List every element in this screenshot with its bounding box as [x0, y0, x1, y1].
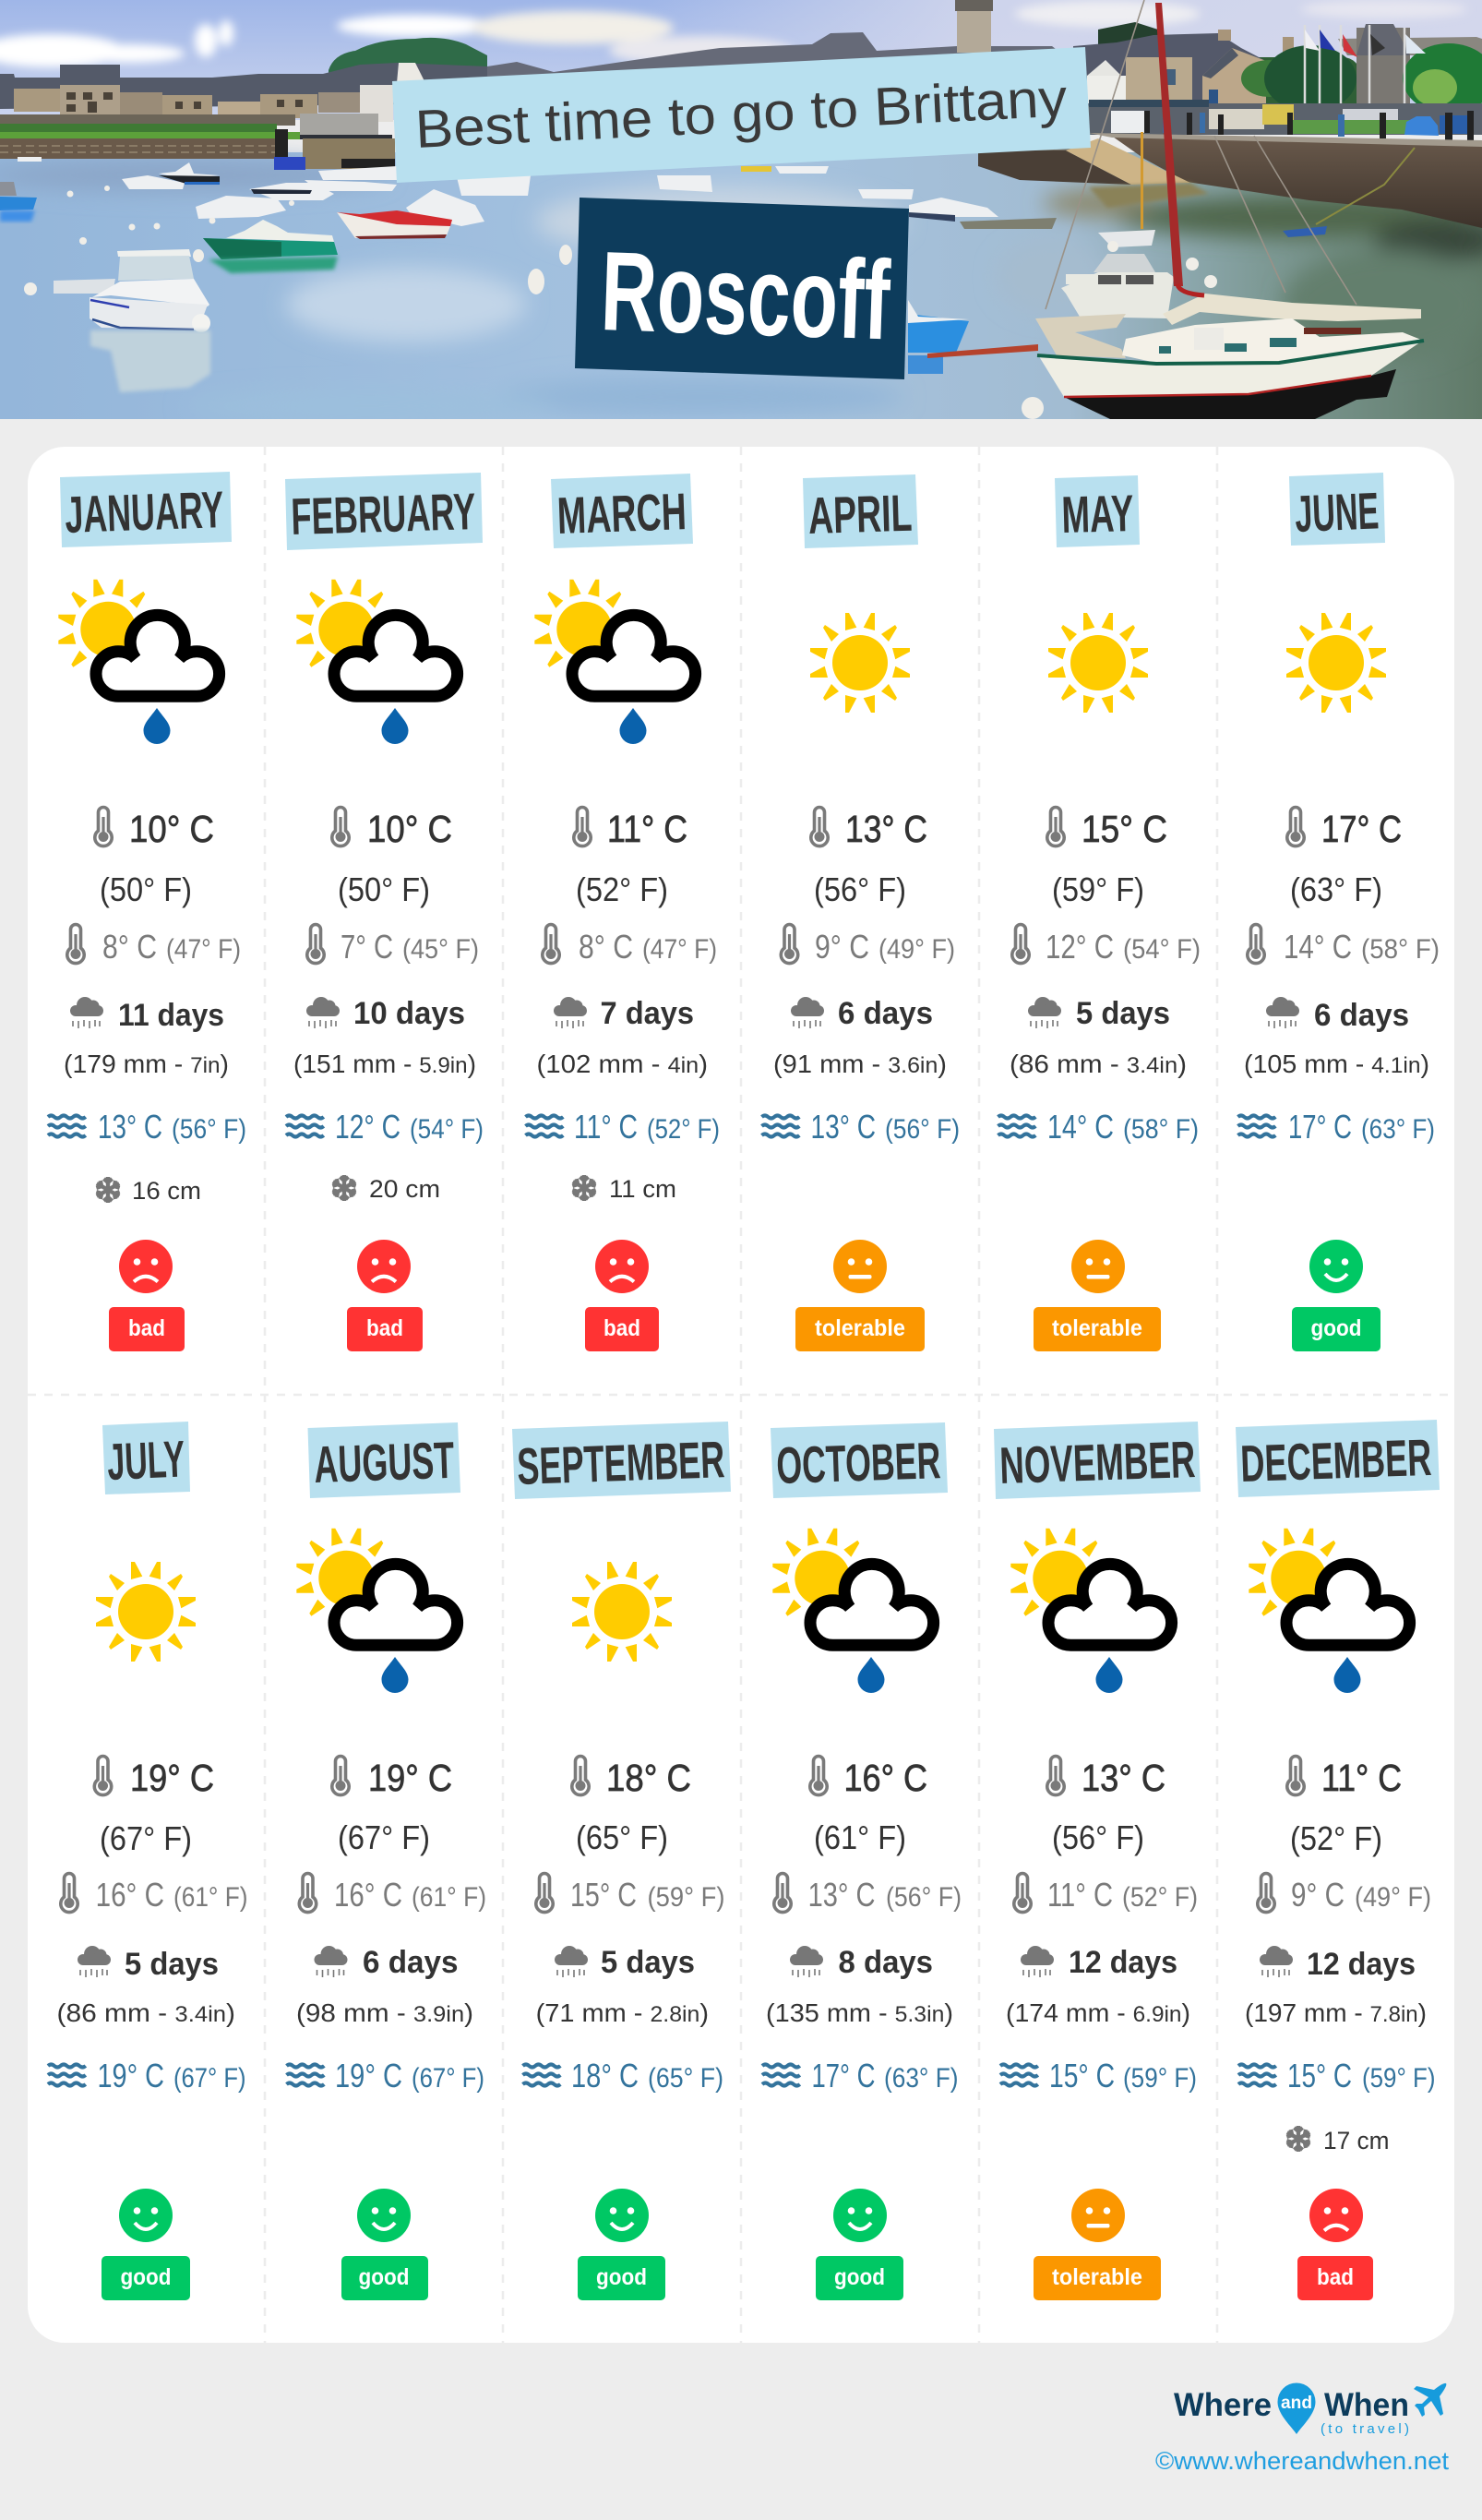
- high temperature: [1287, 807, 1402, 850]
- logo: Where and When: When: [1324, 2387, 1409, 2423]
- low temperature: [61, 1874, 247, 1914]
- high temperature Fahrenheit: (63° F): [1290, 870, 1382, 908]
- precipitation: (91 mm - 3.6in): [773, 1050, 947, 1078]
- right town buildings: [1073, 33, 1264, 106]
- heading: March: [551, 474, 693, 548]
- rating: tolerable: [1034, 2256, 1161, 2300]
- icon: sun with cloud and rain: [296, 580, 458, 744]
- rating: good: good: [834, 2264, 885, 2290]
- rating: bad: bad: [366, 1315, 403, 1341]
- rainy days: [555, 1945, 695, 1980]
- sea temperature: [1000, 2057, 1197, 2094]
- rating: good: [578, 2256, 665, 2300]
- high temperature: [95, 807, 214, 850]
- low temperature: 14° C: [1284, 928, 1352, 966]
- logo: Where and When: and: [1281, 2394, 1312, 2413]
- heading: June: JUNE: [1294, 481, 1380, 543]
- face: good: [595, 2189, 649, 2242]
- low temperature: [536, 1874, 725, 1914]
- low temperature: 16° C: [334, 1876, 402, 1914]
- high temperature: 10° C: [129, 808, 214, 850]
- low temperature: [781, 925, 955, 966]
- face: bad: [119, 1240, 173, 1293]
- heading: September: [512, 1422, 731, 1499]
- snow: 11 cm: [609, 1175, 676, 1203]
- red boat: [337, 212, 450, 238]
- sea temperature: (52° F): [647, 1114, 720, 1145]
- heading: May: [1055, 475, 1140, 547]
- heading: August: AUGUST: [313, 1431, 455, 1494]
- precipitation: (179 mm - 7in): [64, 1050, 229, 1078]
- right town trees: [1098, 22, 1158, 46]
- icon: sun: [1286, 613, 1386, 713]
- street: people and vehicles: [1089, 103, 1482, 135]
- rating: bad: bad: [1317, 2264, 1354, 2290]
- high temperature Fahrenheit: (52° F): [576, 870, 668, 908]
- snow: [95, 1177, 201, 1205]
- rating: good: good: [596, 2264, 647, 2290]
- rating: good: [102, 2256, 190, 2300]
- panel: December: [1236, 1420, 1440, 2300]
- sea temperature: 18° C: [571, 2057, 639, 2094]
- rainy days: [306, 996, 465, 1031]
- rating: tolerable: tolerable: [1052, 1315, 1142, 1341]
- snow: [571, 1175, 676, 1203]
- snow: 16 cm: [132, 1177, 201, 1205]
- rainy days: 12 days: [1069, 1945, 1177, 1980]
- rainy days: 6 days: [1314, 998, 1409, 1033]
- high temperature Fahrenheit: (52° F): [1290, 1819, 1382, 1857]
- rainy days: [70, 997, 224, 1033]
- low temperature: [1014, 1874, 1198, 1914]
- high temperature Fahrenheit: (61° F): [814, 1818, 906, 1856]
- left town: trees: [329, 37, 487, 72]
- rainy days: 10 days: [353, 996, 465, 1031]
- low temperature: [774, 1874, 962, 1914]
- white motor boat left: [54, 279, 115, 294]
- rating: good: good: [358, 2264, 410, 2290]
- low temperature: (54° F): [1123, 934, 1201, 965]
- sailboat cabin: [1122, 318, 1421, 363]
- logo: Where and When: [1174, 2383, 1446, 2437]
- high temperature: [1047, 1756, 1165, 1799]
- heading: November: NOVEMBER: [998, 1430, 1196, 1494]
- rainy days: 12 days: [1307, 1947, 1416, 1982]
- rating: bad: [585, 1307, 659, 1351]
- heading: July: JULY: [106, 1430, 185, 1491]
- sea temperature: 17° C: [1288, 1108, 1352, 1146]
- flags and poles: [1303, 25, 1406, 103]
- icon: sun with cloud and rain: [58, 580, 220, 744]
- sea temperature: 19° C: [335, 2057, 402, 2094]
- panel: April: [762, 474, 960, 1351]
- rating: bad: [347, 1307, 423, 1351]
- rating: good: good: [120, 2264, 172, 2290]
- low temperature: [307, 925, 479, 966]
- low temperature: (47° F): [642, 934, 717, 965]
- low temperature: (47° F): [166, 934, 241, 965]
- precipitation: (105 mm - 4.1in): [1244, 1050, 1429, 1078]
- blue boat at left: [0, 182, 17, 196]
- low temperature: (61° F): [412, 1882, 486, 1913]
- face: tolerable: [1071, 1240, 1125, 1293]
- heading: September: SEPTEMBER: [516, 1430, 725, 1495]
- low temperature: 9° C: [815, 928, 869, 966]
- heading: July: [102, 1422, 190, 1494]
- buoys: [24, 186, 1217, 419]
- face: bad: [357, 1240, 411, 1293]
- logo: Where and When: (to travel): [1321, 2421, 1409, 2437]
- heading: March: MARCH: [556, 482, 687, 545]
- heading: January: [60, 472, 232, 547]
- low temperature: (61° F): [173, 1882, 247, 1913]
- rating: tolerable: [1034, 1307, 1161, 1351]
- low temperature: (49° F): [878, 934, 955, 965]
- snow: [1285, 2126, 1390, 2154]
- heading: February: FEBRUARY: [290, 482, 476, 546]
- panel: May: [998, 475, 1201, 1351]
- snow: 20 cm: [369, 1175, 440, 1203]
- high temperature: 16° C: [843, 1757, 927, 1799]
- low temperature: 11° C: [1047, 1876, 1113, 1914]
- blue boat behind title: [908, 314, 969, 353]
- website url: ©www.whereandwhen.net: [1155, 2447, 1449, 2475]
- heading: April: [803, 474, 918, 548]
- sea temperature: [1238, 1108, 1435, 1146]
- sea temperature: (54° F): [410, 1114, 484, 1145]
- low temperature: 8° C: [579, 928, 633, 966]
- quay wall: [1110, 135, 1482, 228]
- high temperature: 19° C: [368, 1757, 452, 1799]
- high temperature: [332, 807, 452, 850]
- low temperature: 7° C: [341, 928, 393, 966]
- icon: sun with cloud and rain: [1249, 1529, 1410, 1693]
- sea temperature: 13° C: [810, 1108, 876, 1146]
- low temperature: (52° F): [1122, 1882, 1198, 1913]
- sailboat hull: [1037, 340, 1424, 397]
- rainy days: 6 days: [363, 1945, 458, 1980]
- high temperature: [574, 807, 687, 850]
- sea temperature: (58° F): [1123, 1114, 1199, 1145]
- rainy days: [554, 996, 694, 1031]
- sea temperature: [526, 1108, 720, 1146]
- sea temperature: [48, 1108, 246, 1146]
- high temperature: [94, 1756, 214, 1799]
- low temperature: 9° C: [1291, 1876, 1345, 1914]
- sea temperature: 12° C: [335, 1108, 400, 1146]
- high temperature Fahrenheit: (67° F): [338, 1818, 430, 1856]
- snow: [331, 1175, 440, 1203]
- heading: January: JANUARY: [64, 480, 224, 544]
- high temperature Fahrenheit: (65° F): [576, 1818, 668, 1856]
- face: bad: [595, 1240, 649, 1293]
- panel: October: [762, 1422, 962, 2300]
- face: tolerable: [1071, 2189, 1125, 2242]
- sea temperature: [286, 1108, 484, 1146]
- banner: Roscoff: Roscoff: [599, 228, 892, 363]
- icon: sun: [810, 613, 910, 713]
- panel: January: [48, 472, 246, 1351]
- high temperature: 18° C: [606, 1757, 691, 1799]
- left town: low wall and hedges: [0, 114, 295, 126]
- low temperature: (59° F): [648, 1882, 725, 1913]
- heading: February: [285, 473, 483, 550]
- low temperature: 16° C: [96, 1876, 164, 1914]
- sea temperature: [1238, 2057, 1436, 2094]
- precipitation: (86 mm - 3.4in): [57, 1998, 235, 2027]
- low temperature: [67, 925, 241, 966]
- rainy days: [78, 1946, 219, 1982]
- motor boat beside sailboat: [1094, 254, 1155, 272]
- icon: plane: [1414, 2383, 1446, 2417]
- high temperature Fahrenheit: (50° F): [338, 870, 430, 908]
- rainy days: [790, 1945, 933, 1980]
- sea temperature: 17° C: [812, 2057, 875, 2094]
- rating: good: [341, 2256, 428, 2300]
- high temperature: [572, 1756, 691, 1799]
- face: good: [357, 2189, 411, 2242]
- panel: months card: [28, 447, 1454, 2343]
- icon: map pin: [1277, 2383, 1316, 2434]
- sea temperature: [998, 1108, 1199, 1146]
- sea temperature: [522, 2057, 723, 2094]
- low temperature: 8° C: [102, 928, 157, 966]
- high temperature: [332, 1756, 452, 1799]
- rainy days: 8 days: [838, 1945, 933, 1980]
- panel: June: [1238, 473, 1440, 1351]
- high temperature: [811, 807, 927, 850]
- banner: Best time to go to Brittany: Best time to go to Brittany: [413, 68, 1069, 160]
- high temperature: 17° C: [1321, 808, 1402, 850]
- face: good: [1309, 1240, 1363, 1293]
- face: good: [833, 2189, 887, 2242]
- panel: July: [48, 1422, 247, 2300]
- icon: sun with cloud and rain: [534, 580, 696, 744]
- rainy days: [791, 996, 933, 1031]
- low temperature: (56° F): [886, 1882, 962, 1913]
- icon: sun with cloud and rain: [296, 1529, 458, 1693]
- logo: Where and When: Where: [1174, 2387, 1272, 2423]
- high temperature Fahrenheit: (59° F): [1052, 870, 1144, 908]
- precipitation: (197 mm - 7.8in): [1245, 1998, 1427, 2027]
- rating: bad: [109, 1307, 185, 1351]
- left town: walls: [14, 85, 360, 120]
- sea temperature: [48, 2057, 245, 2094]
- rainy days: 5 days: [125, 1947, 219, 1982]
- rating: bad: bad: [128, 1315, 165, 1341]
- sea temperature: (67° F): [173, 2063, 245, 2094]
- panel: November: [994, 1422, 1201, 2300]
- rating: good: [816, 2256, 903, 2300]
- sea temperature: (56° F): [172, 1114, 246, 1145]
- low temperature: (45° F): [402, 934, 479, 965]
- small background boats: [18, 157, 998, 226]
- rainy days: 5 days: [1076, 996, 1170, 1031]
- heading: October: [771, 1422, 948, 1498]
- snow: 17 cm: [1323, 2127, 1390, 2154]
- panel: March: [526, 474, 720, 1351]
- heading: November: [994, 1422, 1201, 1499]
- rating: tolerable: [795, 1307, 925, 1351]
- sea temperature: (67° F): [412, 2063, 484, 2094]
- stone breakwater: [0, 138, 275, 159]
- truck and jetty: [300, 114, 378, 136]
- low temperature: 13° C: [808, 1876, 875, 1914]
- precipitation: (135 mm - 5.3in): [766, 1998, 953, 2027]
- high temperature Fahrenheit: (56° F): [1052, 1818, 1144, 1856]
- sailboat mast and bowsprit: [1155, 3, 1183, 286]
- rating: good: [1292, 1307, 1380, 1351]
- low temperature: [1012, 925, 1201, 966]
- rigging ropes: [1046, 0, 1357, 309]
- sea temperature: [286, 2057, 484, 2094]
- icon: sun with cloud and rain: [772, 1529, 934, 1693]
- sea temperature: 15° C: [1287, 2057, 1352, 2094]
- face: tolerable: [833, 1240, 887, 1293]
- sea temperature: (59° F): [1362, 2063, 1436, 2094]
- sea temperature: (63° F): [1361, 1114, 1435, 1145]
- rating: bad: bad: [604, 1315, 640, 1341]
- heading: October: OCTOBER: [775, 1431, 941, 1494]
- rainy days: 7 days: [600, 996, 694, 1031]
- rating: bad: [1297, 2256, 1373, 2300]
- rainy days: 6 days: [838, 996, 933, 1031]
- sea temperature: 11° C: [574, 1108, 638, 1146]
- rainy days: [1021, 1945, 1177, 1980]
- high temperature: 11° C: [607, 808, 687, 850]
- high temperature: 11° C: [1321, 1757, 1402, 1799]
- sea temperature: 19° C: [98, 2057, 164, 2094]
- panel: August: [286, 1422, 486, 2300]
- high temperature: 13° C: [845, 808, 927, 850]
- low temperature: [299, 1874, 486, 1914]
- icon: sun: [1048, 613, 1148, 713]
- high temperature Fahrenheit: (67° F): [100, 1819, 192, 1857]
- high temperature: [1047, 807, 1167, 850]
- high temperature: 13° C: [1082, 1757, 1165, 1799]
- banner: Roscoff: [575, 198, 909, 379]
- right town green trees: [1403, 43, 1482, 103]
- rainy days: [1266, 997, 1409, 1033]
- low temperature: [1258, 1874, 1431, 1914]
- precipitation: (71 mm - 2.8in): [536, 1998, 709, 2027]
- high temperature Fahrenheit: (56° F): [814, 870, 906, 908]
- water base: [0, 152, 1482, 419]
- high temperature: 19° C: [130, 1757, 214, 1799]
- precipitation: (151 mm - 5.9in): [293, 1050, 476, 1078]
- sailboat sail: [1163, 294, 1421, 325]
- rating: tolerable: tolerable: [815, 1315, 905, 1341]
- rainy days: [1260, 1946, 1416, 1982]
- sea temperature: [762, 1108, 960, 1146]
- rainy days: 11 days: [118, 998, 224, 1033]
- sea temperature: (65° F): [648, 2063, 723, 2094]
- town behind title: [487, 32, 1056, 77]
- heading: April: APRIL: [807, 484, 913, 545]
- panel: February: [285, 473, 484, 1351]
- heading: June: [1289, 473, 1385, 546]
- heading: May: MAY: [1061, 484, 1134, 544]
- low temperature: [1248, 925, 1440, 966]
- high temperature: [810, 1756, 927, 1799]
- low temperature: 12° C: [1046, 928, 1114, 966]
- low temperature: 15° C: [570, 1876, 637, 1914]
- rainy days: 5 days: [601, 1945, 695, 1980]
- left town: roofs: [0, 63, 487, 109]
- precipitation: (102 mm - 4in): [537, 1050, 708, 1078]
- low temperature: (49° F): [1355, 1882, 1431, 1913]
- sea temperature: 13° C: [98, 1108, 162, 1146]
- precipitation: (174 mm - 6.9in): [1006, 1998, 1190, 2027]
- face: bad: [1309, 2189, 1363, 2242]
- rainy days: [1028, 996, 1170, 1031]
- icon: sun: [96, 1562, 196, 1662]
- sea temperature: 14° C: [1047, 1108, 1114, 1146]
- sea temperature: (56° F): [885, 1114, 960, 1145]
- high temperature Fahrenheit: (50° F): [100, 870, 192, 908]
- high temperature: [1287, 1756, 1402, 1799]
- rating: tolerable: tolerable: [1052, 2264, 1142, 2290]
- face: good: [119, 2189, 173, 2242]
- low temperature: [543, 925, 717, 966]
- photo: Roscoff harbour: [0, 0, 1482, 421]
- rainy days: [314, 1945, 458, 1980]
- sea temperature: 15° C: [1049, 2057, 1115, 2094]
- lower wall and ramp: [978, 150, 1131, 185]
- precipitation: (86 mm - 3.4in): [1010, 1050, 1187, 1078]
- panel: September: [512, 1422, 731, 2300]
- heading: August: [308, 1422, 460, 1498]
- icon: sun with cloud and rain: [1010, 1529, 1172, 1693]
- sea temperature: [762, 2057, 958, 2094]
- high temperature: 15° C: [1082, 808, 1167, 850]
- high temperature: 10° C: [367, 808, 452, 850]
- sea temperature: (63° F): [884, 2063, 958, 2094]
- precipitation: (98 mm - 3.9in): [296, 1998, 473, 2027]
- banner: Best time to go to Brittany: [392, 47, 1091, 183]
- sea temperature: (59° F): [1123, 2063, 1197, 2094]
- low temperature: (58° F): [1361, 934, 1440, 965]
- green boat: [221, 220, 334, 242]
- rating: good: good: [1310, 1315, 1362, 1341]
- icon: sun: [572, 1562, 672, 1662]
